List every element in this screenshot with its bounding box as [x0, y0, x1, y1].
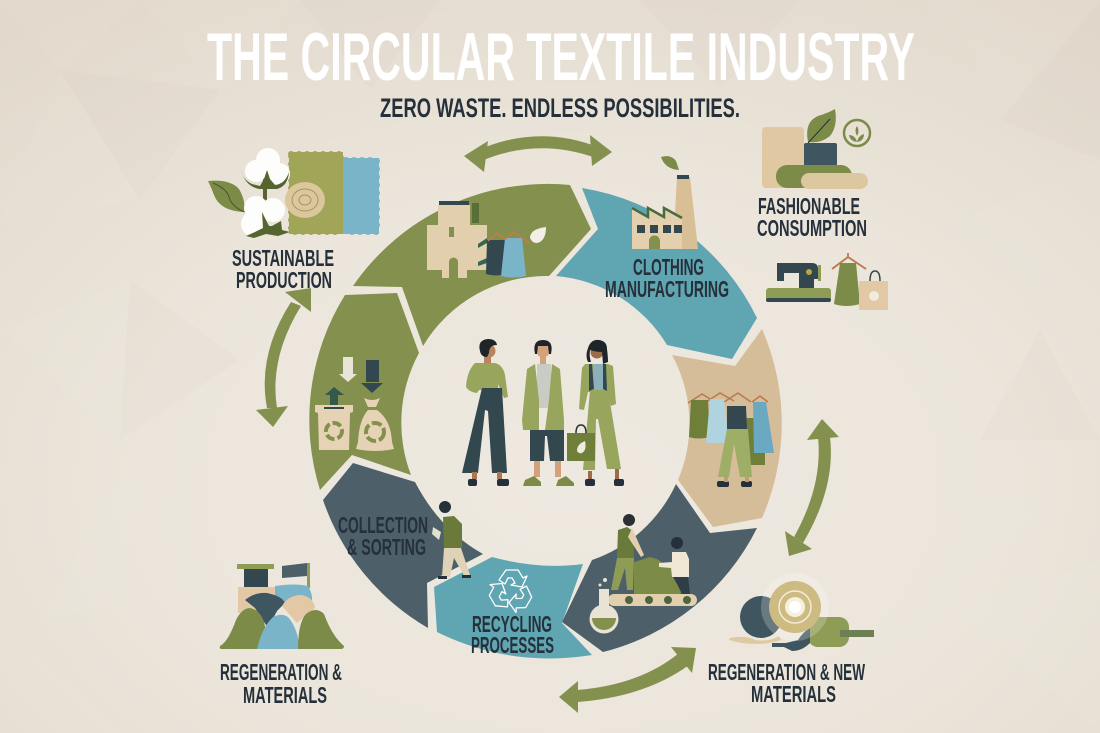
subtitle: ZERO WASTE. ENDLESS POSSIBILITIES.	[380, 93, 740, 123]
segment: collection dark	[323, 463, 483, 628]
segment: collection green	[309, 293, 419, 490]
label: sustainable production: PRODUCTION	[236, 267, 332, 293]
label: clothing manufacturing: CLOTHING	[633, 254, 704, 280]
label: regeneration and new materials: REGENERATION & NEW	[708, 659, 865, 685]
label: collection and sorting	[338, 512, 428, 560]
icon: yarn and glowing spool	[729, 573, 874, 651]
label: recycling processes	[471, 611, 554, 658]
center figures	[462, 339, 624, 486]
label: clothing manufacturing	[605, 254, 729, 302]
segment: regeneration dark	[562, 484, 757, 652]
segment: recycling teal	[434, 557, 592, 658]
label: regeneration and materials: REGENERATION &	[220, 659, 342, 685]
figure: woman left	[462, 339, 509, 486]
figure: person center	[522, 340, 574, 486]
label: regeneration and materials: MATERIALS	[243, 682, 327, 708]
label: clothing manufacturing: MANUFACTURING	[605, 276, 729, 302]
segment: manufacturing teal	[556, 188, 757, 359]
figure: woman right with bag	[567, 340, 624, 486]
label: regeneration and new materials	[708, 659, 865, 707]
arrow: top double-headed	[464, 135, 612, 172]
label: regeneration and new materials: MATERIALS	[751, 681, 836, 707]
label: fashionable consumption: FASHIONABLE	[758, 193, 860, 219]
label: collection and sorting: COLLECTION	[338, 512, 428, 538]
segment: consumption tan	[672, 329, 782, 527]
icon: worker with clothes	[432, 501, 471, 579]
arrow: bottom double-headed	[559, 647, 696, 713]
arrow: right double-headed	[785, 419, 839, 556]
icon: green factory with garments	[427, 201, 546, 278]
label: fashionable consumption: CONSUMPTION	[757, 215, 867, 241]
icon: hanging clothes rack	[688, 393, 774, 487]
label: collection and sorting: & SORTING	[347, 534, 426, 560]
icon: recycling workers and conveyor	[590, 514, 697, 634]
label: sustainable production	[232, 245, 334, 293]
segment: production green	[353, 184, 591, 346]
icon: recycling bin and sack	[315, 357, 394, 451]
label: recycling processes: RECYCLING	[472, 611, 552, 637]
label: regeneration and materials	[220, 659, 342, 708]
icon: material piles	[220, 563, 344, 649]
label: fashionable consumption	[757, 193, 867, 241]
label: sustainable production: SUSTAINABLE	[232, 245, 334, 271]
icon: cotton and fabric	[208, 148, 379, 238]
icon: sewing machine, dress and bag	[766, 253, 888, 310]
icon: clothing factory	[632, 156, 698, 249]
label: recycling processes: PROCESSES	[471, 632, 554, 658]
arrow: left double-headed	[256, 288, 311, 427]
panel: circular flow ring	[309, 184, 782, 658]
icon: recycle symbol	[485, 570, 535, 615]
icon: fabric stack and leaf	[762, 109, 870, 189]
